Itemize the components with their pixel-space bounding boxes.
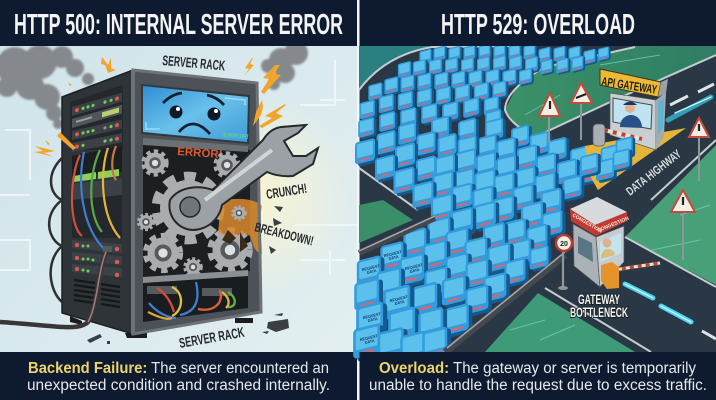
teal corner	[359, 46, 432, 90]
queue of request cards main mass	[353, 115, 609, 368]
power cable	[0, 248, 108, 327]
queue of request cards on curved road	[358, 43, 611, 141]
rack front face	[133, 70, 261, 334]
booth walls	[610, 93, 656, 150]
label: breakdown: BREAKDOWN!	[253, 219, 315, 248]
request data labels on cards: DATA	[364, 339, 375, 345]
request data labels on cards	[359, 250, 425, 346]
label: server rack bottom: SERVER RACK	[178, 324, 246, 351]
caption left	[27, 360, 330, 394]
request data labels on cards: REQUEST	[361, 264, 380, 272]
caption right: Overload: The gateway or server is temporarily	[379, 360, 696, 377]
label: data highway: DATA HIGHWAY	[623, 147, 684, 198]
light streaks	[625, 97, 711, 322]
cards at gate	[601, 143, 620, 169]
api gateway sign	[600, 69, 661, 97]
label: gateway bottleneck: BOTTLENECK	[570, 304, 628, 320]
panel: HTTP 529 overload	[353, 0, 716, 400]
label: crunch: CRUNCH!	[265, 181, 308, 202]
header bar right	[360, 0, 716, 46]
lower cable bay	[143, 270, 248, 322]
server rack	[0, 70, 262, 338]
sad face screen: ERROR!	[223, 132, 249, 141]
green right field	[625, 145, 716, 285]
panel: HTTP 500 internal server error	[0, 0, 357, 400]
api gateway toll booth	[580, 69, 686, 190]
request data labels on cards: REQUEST	[404, 263, 423, 271]
booth window and officer	[613, 98, 652, 129]
request data labels on cards: DATA	[388, 255, 399, 261]
congestion barrier	[614, 263, 660, 270]
label: server rack top: SERVER RACK	[162, 52, 226, 73]
debris	[87, 206, 289, 344]
breakage glow	[218, 199, 262, 254]
request data labels on cards: REQUEST	[359, 334, 378, 342]
congestion booth: CONGESTION	[571, 213, 603, 235]
yellow base	[585, 128, 686, 190]
rack side face	[62, 70, 133, 334]
title left: HTTP 500: INTERNAL SERVER ERROR	[14, 9, 343, 41]
divider	[357, 0, 360, 400]
gear compartment	[138, 138, 262, 280]
green island	[505, 46, 716, 137]
sad face screen	[141, 84, 250, 144]
caption right	[369, 360, 707, 394]
loose wire loops	[49, 158, 62, 302]
request data labels on cards: DATA	[409, 268, 420, 274]
caption left: Backend Failure: The server encountered an	[28, 360, 329, 377]
road dashes	[670, 84, 716, 339]
rack feet	[70, 316, 253, 338]
request data labels on cards: DATA	[367, 317, 378, 323]
header bar left	[0, 0, 357, 46]
request data labels on cards: REQUEST	[383, 250, 402, 258]
green left field	[359, 200, 413, 243]
request data labels on cards: DATA	[366, 269, 377, 275]
green lower field	[485, 293, 635, 352]
congestion booth	[556, 197, 660, 290]
guardrails	[359, 216, 565, 352]
congestion booth: CONGESTION	[597, 216, 630, 234]
error label: ERROR!	[177, 146, 223, 161]
wrench	[169, 125, 318, 230]
warning signs	[539, 83, 709, 260]
label: gateway bottleneck	[570, 291, 628, 320]
congestion booth: 20	[560, 241, 568, 248]
request data labels on cards: DATA	[394, 300, 405, 306]
request data labels on cards: REQUEST	[362, 312, 381, 320]
caption bar left	[0, 352, 357, 400]
rack frame highlights	[133, 70, 261, 334]
request data labels on cards: REQUEST	[389, 295, 408, 303]
caption bar right	[360, 352, 716, 400]
smoke clouds	[0, 41, 308, 129]
label: gateway bottleneck: GATEWAY	[578, 291, 620, 307]
colored cables on side face	[72, 146, 120, 250]
road edges	[359, 46, 716, 352]
speed limit sign	[562, 250, 564, 288]
caption left: unexpected condition and crashed internally.	[27, 377, 330, 394]
api gateway toll booth: API GATEWAY	[601, 74, 658, 97]
barrier arm	[604, 130, 642, 139]
side face server units	[70, 85, 123, 307]
caption right: unable to handle the request due to excess traffic.	[369, 377, 707, 394]
sparks	[34, 57, 286, 157]
